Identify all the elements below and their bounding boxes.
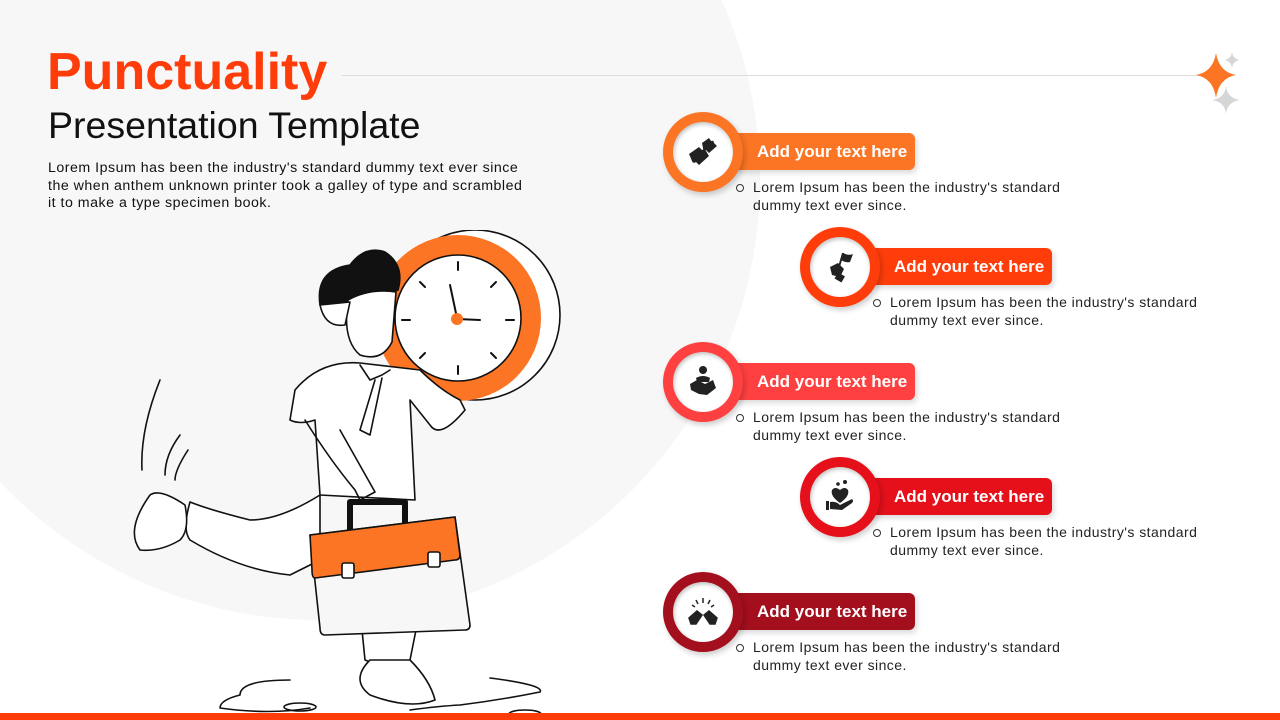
item 4: Lorem Ipsum has been the industry's standard xyxy=(890,524,1197,540)
back leg xyxy=(186,495,320,575)
icon: handshake person xyxy=(690,366,716,395)
icon: heart in hand xyxy=(826,480,853,510)
item 4 xyxy=(800,457,1197,558)
clock xyxy=(390,230,560,400)
item 5: dummy text ever since. xyxy=(753,657,907,673)
item 2: dummy text ever since. xyxy=(890,312,1044,328)
item 5 xyxy=(662,572,1060,673)
ground squiggles xyxy=(220,678,540,712)
icon: hand with flag xyxy=(830,253,853,282)
item 4: Add your text here xyxy=(894,487,1044,506)
briefcase xyxy=(350,502,405,532)
item 1: Lorem Ipsum has been the industry's standard xyxy=(753,179,1060,195)
item 1 xyxy=(662,112,1060,213)
item 3: dummy text ever since. xyxy=(753,427,907,443)
icon: sparkles xyxy=(1196,52,1240,114)
item 3: Add your text here xyxy=(757,372,907,391)
header line xyxy=(342,75,1202,76)
item 2: Add your text here xyxy=(894,257,1044,276)
item 2: Lorem Ipsum has been the industry's standard xyxy=(890,294,1197,310)
icon: puzzle xyxy=(689,138,717,165)
item 4: dummy text ever since. xyxy=(890,542,1044,558)
icon: fist bump xyxy=(688,598,718,625)
hair / head xyxy=(319,250,400,305)
illustration: man running with clock and briefcase xyxy=(134,230,561,713)
front leg xyxy=(360,610,420,670)
item 3 xyxy=(662,342,1060,443)
intro paragraph: Lorem Ipsum has been the industry's standard dummy text ever since xyxy=(48,160,518,176)
item 2 xyxy=(800,227,1197,328)
title: Punctuality xyxy=(47,43,327,101)
body xyxy=(290,363,465,500)
intro paragraph xyxy=(48,160,522,211)
item 5: Add your text here xyxy=(757,602,907,621)
item 5: Lorem Ipsum has been the industry's standard xyxy=(753,639,1060,655)
item 3: Lorem Ipsum has been the industry's standard xyxy=(753,409,1060,425)
item 1: dummy text ever since. xyxy=(753,197,907,213)
bottom bar xyxy=(0,713,1280,720)
background circle xyxy=(0,0,760,620)
arm xyxy=(305,420,375,500)
intro paragraph: the when anthem unknown printer took a galley of type and scrambled xyxy=(48,178,522,194)
subtitle: Presentation Template xyxy=(48,104,420,146)
intro paragraph: it to make a type specimen book. xyxy=(48,195,271,211)
item 1: Add your text here xyxy=(757,142,907,161)
